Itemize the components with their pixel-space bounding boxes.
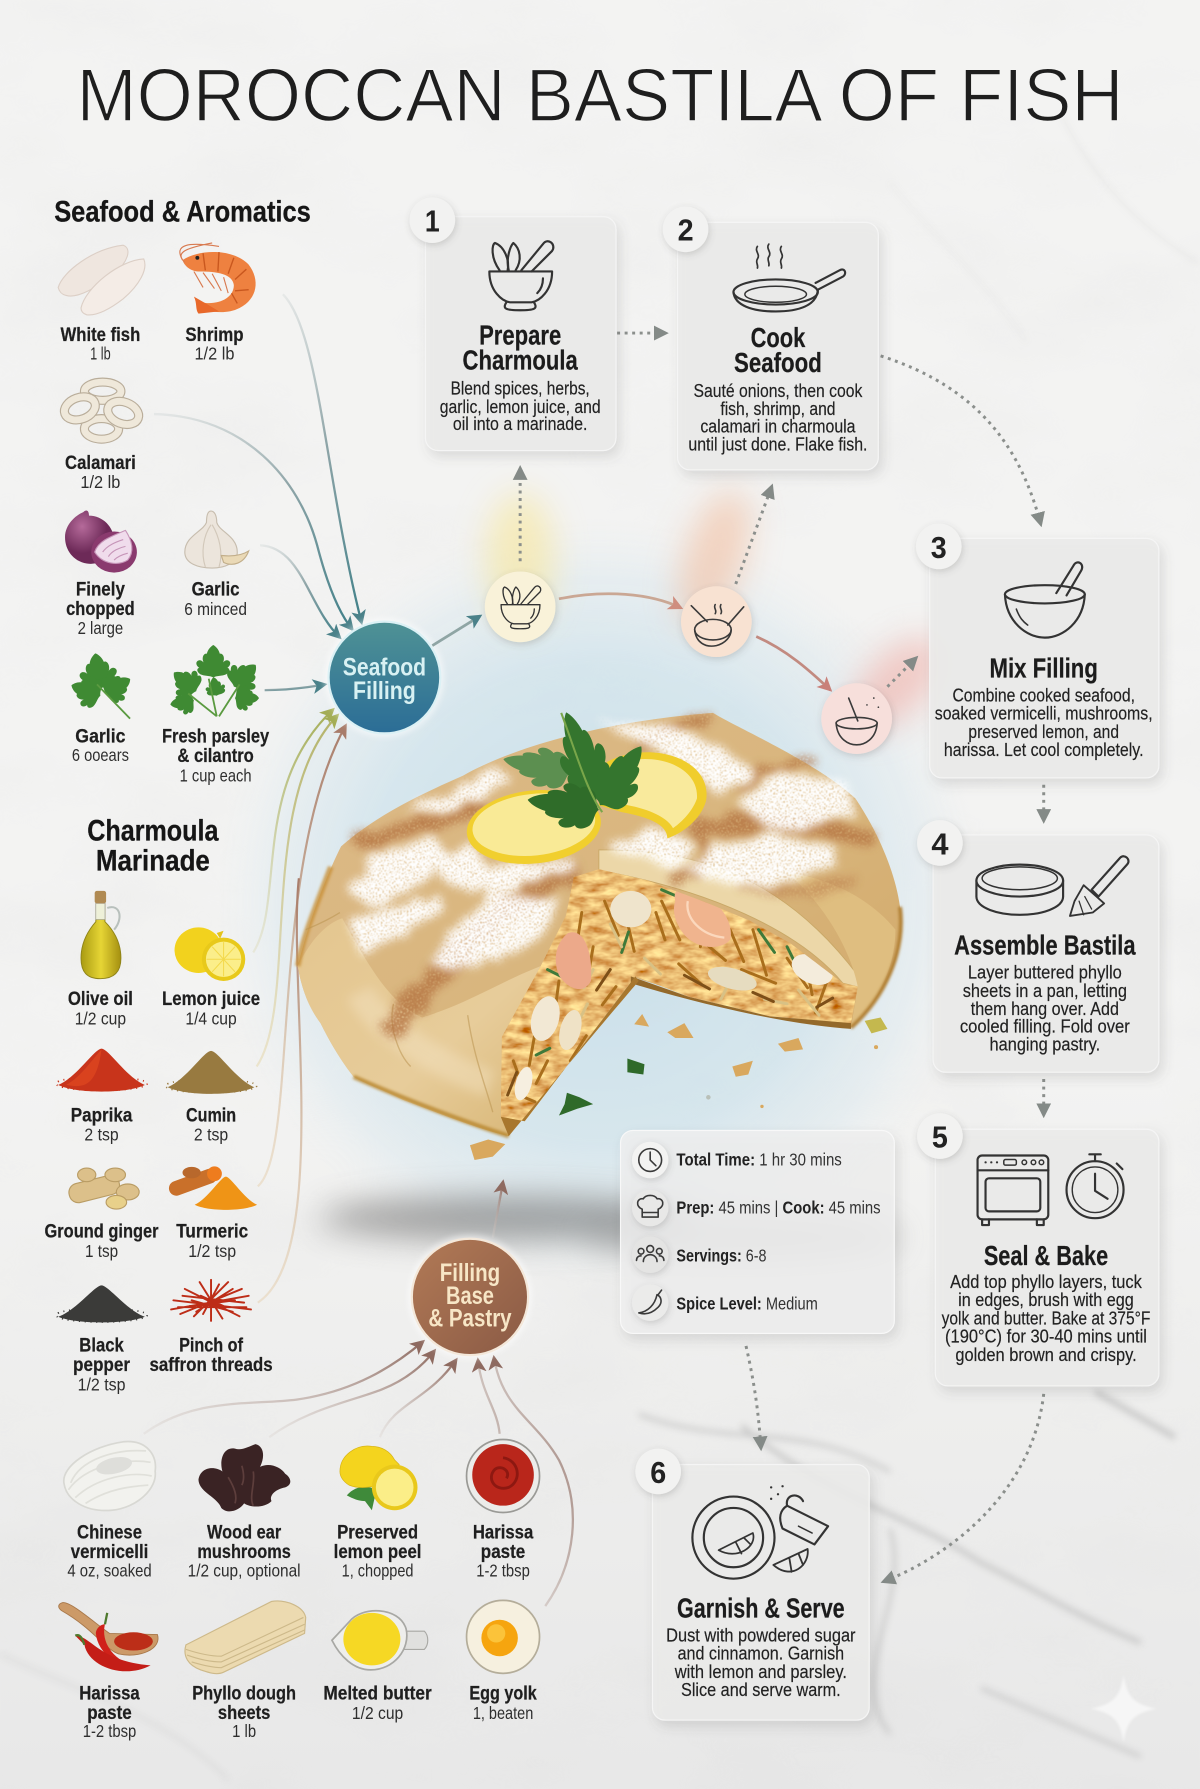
lemon slice garnish xyxy=(463,752,707,870)
cinnamon stripes xyxy=(363,719,867,1027)
ingredient: harissa bowl xyxy=(467,1440,540,1580)
icon: pie pan xyxy=(976,865,1063,915)
ingredient: onion: 2 large xyxy=(78,618,123,638)
ingredient: chilis and spoon xyxy=(59,1603,158,1741)
panel: Charmoula Marinade xyxy=(45,815,273,1394)
step 6 text: with lemon and parsley. xyxy=(674,1661,847,1682)
step 5 text: Seal & Bake xyxy=(984,1240,1108,1271)
arrows: base ingredients to Filling Base xyxy=(144,1341,573,1606)
ingredient: onion: Finely xyxy=(76,578,125,600)
ingredient: white fish: 1 lb xyxy=(90,343,111,363)
ingredient: chilis and spoon: Harissa xyxy=(79,1683,140,1705)
ingredient: calamari xyxy=(61,382,142,492)
node: Seafood Filling: Seafood xyxy=(343,653,426,681)
ingredient: fresh parsley and cilantro: Fresh parsley xyxy=(162,726,269,748)
step 4 text: sheets in a pan, letting xyxy=(963,980,1127,1001)
panel: Seafood & Aromatics xyxy=(54,195,311,785)
step node 3: bowl xyxy=(821,683,892,754)
ingredient: Chinese vermicelli xyxy=(64,1442,155,1580)
ingredient: Chinese vermicelli: 4 oz, soaked xyxy=(67,1560,152,1580)
arrow: node 3 to step 3 xyxy=(887,659,915,687)
step 4 text: Layer buttered phyllo xyxy=(968,962,1122,983)
ingredient: black pepper xyxy=(56,1285,147,1394)
ingredient: white fish xyxy=(58,245,145,363)
step 6 text: Garnish & Serve xyxy=(677,1592,845,1623)
node: Seafood Filling: Filling xyxy=(353,677,416,705)
step 1 card xyxy=(410,197,616,451)
ingredient: harissa bowl: 1-2 tbsp xyxy=(476,1560,530,1580)
ingredient: turmeric: Turmeric xyxy=(176,1221,248,1243)
panel: base and pastry ingredients xyxy=(59,1440,540,1741)
step 5 text: (190°C) for 30-40 mins until xyxy=(945,1326,1147,1347)
step 4 text: Assemble Bastila xyxy=(954,930,1136,961)
step 5 text: yolk and butter. Bake at 375°F xyxy=(942,1307,1150,1328)
ingredient: paprika xyxy=(56,1049,147,1145)
step 3 text: Mix Filling xyxy=(990,653,1098,684)
icon: pastry brush xyxy=(1070,856,1128,916)
badge 5: 5 xyxy=(932,1119,948,1154)
ingredient: harissa bowl: Harissa xyxy=(473,1522,533,1544)
arrow: info panel to step 6 xyxy=(746,1346,761,1446)
ingredient: Chinese vermicelli: vermicelli xyxy=(71,1541,148,1563)
arrows: charmoula ingredients to Seafood Filling xyxy=(253,709,346,1303)
node: Filling Base & Pastry: & Pastry xyxy=(428,1305,512,1333)
step 6 text: Dust with powdered sugar xyxy=(666,1624,856,1645)
ingredient: wood ear mushrooms: 1/2 cup, optional xyxy=(188,1560,301,1580)
step 2 text: Sauté onions, then cook xyxy=(694,380,863,401)
badge 2: 2 xyxy=(678,213,694,248)
step 2 text: Seafood xyxy=(734,347,822,378)
arrows: seafood ingredients to Seafood Filling xyxy=(154,294,362,690)
sparkle watermark xyxy=(1090,1674,1157,1743)
ingredient: fresh parsley and cilantro xyxy=(162,645,269,785)
arrow: node 1 to step 1 xyxy=(519,470,521,561)
row: total time xyxy=(632,1142,842,1178)
ingredient: egg yolk: Egg yolk xyxy=(469,1683,537,1705)
ingredient: parsley sprig: 6 ooears xyxy=(72,745,129,765)
step 1 text: Blend spices, herbs, xyxy=(451,378,590,399)
heading: Marinade xyxy=(96,844,210,877)
icon: plate with lemon xyxy=(692,1497,775,1579)
arrow: step 2 to step 3 xyxy=(881,356,1040,522)
icon: sugar shaker xyxy=(771,1486,828,1544)
flow glows xyxy=(486,482,958,747)
node: Seafood Filling xyxy=(325,618,444,737)
heading: Charmoula xyxy=(87,815,219,848)
step node 1: mortar xyxy=(485,571,556,642)
step 5 text xyxy=(942,1240,1150,1365)
ingredient: shrimp: 1/2 lb xyxy=(194,343,235,363)
ingredient: garlic: Garlic xyxy=(192,578,240,600)
ingredient: calamari: 1/2 lb xyxy=(80,472,121,492)
ingredient: phyllo dough: Phyllo dough xyxy=(192,1683,296,1705)
icon: mortar and pestle xyxy=(489,241,553,310)
arrow: node 2 to step 2 xyxy=(736,488,771,584)
step 1 text xyxy=(440,319,601,434)
ingredient: lemon xyxy=(162,927,260,1028)
ingredient: preserved lemon: Preserved xyxy=(337,1522,418,1544)
ingredient: ginger xyxy=(45,1168,159,1261)
step 6 card xyxy=(635,1449,869,1720)
ingredient: saffron threads: saffron threads xyxy=(149,1354,273,1376)
ingredient: wood ear mushrooms: Wood ear xyxy=(207,1522,282,1544)
row: spice level xyxy=(632,1284,818,1321)
ingredient: parsley sprig: Garlic xyxy=(75,726,126,748)
icon: frying pan xyxy=(733,244,845,311)
ingredient: Chinese vermicelli: Chinese xyxy=(77,1522,142,1544)
ingredient: cumin: Cumin xyxy=(186,1104,236,1126)
ingredient: lemon: 1/4 cup xyxy=(185,1008,237,1028)
step 4 card xyxy=(917,820,1159,1072)
icon: oven xyxy=(978,1155,1048,1225)
row: servings xyxy=(632,1236,767,1273)
ingredient: ginger: 1 tsp xyxy=(85,1241,118,1261)
arrow: step 4 to step 5 xyxy=(1042,1079,1045,1113)
node: Filling Base & Pastry: Base xyxy=(446,1282,494,1310)
ingredient: melted butter: 1/2 cup xyxy=(352,1703,403,1723)
left pastry wall xyxy=(298,867,541,1136)
ingredient: onion: chopped xyxy=(66,598,135,620)
row: prep and cook xyxy=(632,1190,881,1226)
step 6 text: and cinnamon. Garnish xyxy=(678,1643,844,1664)
ingredient: black pepper: 1/2 tsp xyxy=(78,1374,126,1394)
step 3 text: preserved lemon, and xyxy=(968,721,1119,742)
ingredient: olive oil xyxy=(68,891,133,1028)
ingredient: phyllo dough xyxy=(185,1601,306,1741)
node: Filling Base & Pastry: Filling xyxy=(440,1259,500,1287)
badge 5 xyxy=(917,1113,963,1159)
step 5 text: in edges, brush with egg xyxy=(958,1289,1134,1310)
panel: recipe info xyxy=(621,1130,894,1333)
ingredient: chilis and spoon: 1-2 tbsp xyxy=(83,1721,136,1741)
ingredient: lemon: Lemon juice xyxy=(162,988,260,1010)
step 2 text: calamari in charmoula xyxy=(700,415,856,436)
ingredient: paprika: 2 tsp xyxy=(84,1125,119,1145)
ingredient: turmeric: 1/2 tsp xyxy=(188,1241,236,1261)
ingredient: onion xyxy=(65,511,137,638)
arrow: Filling Base to bastila xyxy=(493,1182,503,1238)
ingredient: turmeric xyxy=(167,1166,257,1261)
step 3 card xyxy=(916,524,1159,778)
powdered sugar patches xyxy=(347,723,853,967)
step node 2: pan xyxy=(681,586,752,657)
ingredient: saffron threads: Pinch of xyxy=(179,1335,243,1357)
step 4 text: them hang over. Add xyxy=(971,998,1119,1019)
step 2 text: Cook xyxy=(751,322,806,353)
ingredient: wood ear mushrooms: mushrooms xyxy=(197,1541,291,1563)
badge 6: 6 xyxy=(650,1455,666,1490)
node: Filling Base & Pastry xyxy=(408,1235,532,1359)
step 1 text: garlic, lemon juice, and xyxy=(440,396,601,417)
arrow: node 1 to node 2 xyxy=(559,594,681,608)
badge 3: 3 xyxy=(931,530,947,565)
ingredient: black pepper: Black xyxy=(79,1335,124,1357)
bottom crust xyxy=(501,976,851,1136)
step 2 text: fish, shrimp, and xyxy=(720,398,836,419)
heading: Seafood & Aromatics xyxy=(54,195,311,228)
ingredient: garlic: 6 minced xyxy=(184,599,247,619)
step 3 text xyxy=(935,653,1153,760)
ingredient: parsley sprig xyxy=(66,651,138,765)
step 4 text: hanging pastry. xyxy=(990,1034,1100,1055)
ingredient: white fish: White fish xyxy=(60,324,140,346)
filling xyxy=(501,869,858,1122)
ingredient: olive oil: Olive oil xyxy=(68,988,133,1010)
badge 1: 1 xyxy=(425,204,440,239)
step 6 text: Slice and serve warm. xyxy=(681,1679,841,1700)
arrow: step 5 to step 6 xyxy=(885,1394,1044,1581)
step 5 card xyxy=(917,1113,1159,1386)
row: servings: Servings: 6-8 xyxy=(676,1246,767,1266)
ingredient: shrimp xyxy=(180,243,256,363)
ingredient: preserved lemon: 1, chopped xyxy=(342,1560,414,1580)
icon: lemon wedge xyxy=(773,1549,808,1572)
ingredient: preserved lemon: lemon peel xyxy=(334,1541,421,1563)
ingredient: fresh parsley and cilantro: & cilantro xyxy=(177,745,254,767)
step 5 text: Add top phyllo layers, tuck xyxy=(950,1271,1143,1292)
ingredient: melted butter xyxy=(323,1611,432,1723)
ingredient: paprika: Paprika xyxy=(71,1104,133,1126)
step 4 text: cooled filling. Fold over xyxy=(960,1015,1130,1036)
bastila photo illustration xyxy=(298,704,901,1160)
parsley garnish xyxy=(499,704,659,832)
icon: stopwatch xyxy=(1067,1154,1124,1218)
ingredient: saffron threads xyxy=(149,1280,273,1376)
ingredient: calamari: Calamari xyxy=(65,452,136,474)
ingredient: phyllo dough: sheets xyxy=(218,1702,270,1724)
badge 4: 4 xyxy=(931,826,948,861)
arrow: step 1 to step 2 xyxy=(617,332,664,334)
ingredient: garlic xyxy=(184,511,249,619)
ingredient: olive oil: 1/2 cup xyxy=(75,1008,126,1028)
ingredient: cumin xyxy=(165,1051,257,1145)
ingredient: preserved lemon xyxy=(334,1446,421,1580)
arrow: step 3 to step 4 xyxy=(1042,785,1045,819)
ingredient: fresh parsley and cilantro: 1 cup each xyxy=(180,765,252,785)
heading xyxy=(87,815,219,877)
badge 3 xyxy=(916,524,962,569)
step 1 text: Charmoula xyxy=(463,345,578,376)
ingredient: chilis and spoon: paste xyxy=(87,1702,132,1724)
step 1 text: oil into a marinade. xyxy=(453,413,587,434)
step 4 text xyxy=(954,930,1136,1055)
step 3 text: soaked vermicelli, mushrooms, xyxy=(935,703,1153,724)
ingredient: egg yolk: 1, beaten xyxy=(473,1703,533,1723)
ingredient: melted butter: Melted butter xyxy=(323,1683,432,1705)
right pastry wall and lip xyxy=(599,850,901,1028)
pastry crumbs xyxy=(470,1014,887,1160)
title: MOROCCAN BASTILA OF FISH xyxy=(76,53,1124,137)
ingredient: black pepper: pepper xyxy=(73,1354,130,1376)
step 2 text xyxy=(688,322,867,455)
step 2 card xyxy=(663,206,878,470)
ingredient: egg yolk xyxy=(467,1600,540,1723)
arrow: node 2 to node 3 xyxy=(756,636,830,690)
step 2 text: until just done. Flake fish. xyxy=(688,434,867,455)
pastry body xyxy=(298,713,901,1136)
ingredient: cumin: 2 tsp xyxy=(194,1125,228,1145)
icon: mixing bowl xyxy=(1005,562,1085,638)
ingredient: ginger: Ground ginger xyxy=(45,1221,159,1243)
step 3 text: harissa. Let cool completely. xyxy=(944,739,1144,760)
badge 6 xyxy=(635,1449,681,1494)
row: spice level: Spice Level: Medium xyxy=(676,1293,818,1313)
ingredient: harissa bowl: paste xyxy=(481,1541,525,1563)
step 6 text xyxy=(666,1592,856,1700)
row: prep and cook: Prep: 45 mins | Cook: 45 mins xyxy=(676,1198,881,1218)
badge 2 xyxy=(663,206,708,252)
step 5 text: golden brown and crispy. xyxy=(955,1344,1137,1365)
row: total time: Total Time: 1 hr 30 mins xyxy=(676,1150,842,1170)
ingredient: phyllo dough: 1 lb xyxy=(232,1721,256,1741)
ingredient: wood ear mushrooms xyxy=(188,1444,301,1580)
step 1 text: Prepare xyxy=(479,319,561,350)
dotted arrows between steps xyxy=(520,333,1044,1581)
badge 4 xyxy=(917,820,963,866)
arrow: Seafood Filling to step node 1 xyxy=(432,616,480,646)
badge 1 xyxy=(410,197,455,243)
step 3 text: Combine cooked seafood, xyxy=(952,685,1135,706)
ingredient: shrimp: Shrimp xyxy=(185,324,244,346)
